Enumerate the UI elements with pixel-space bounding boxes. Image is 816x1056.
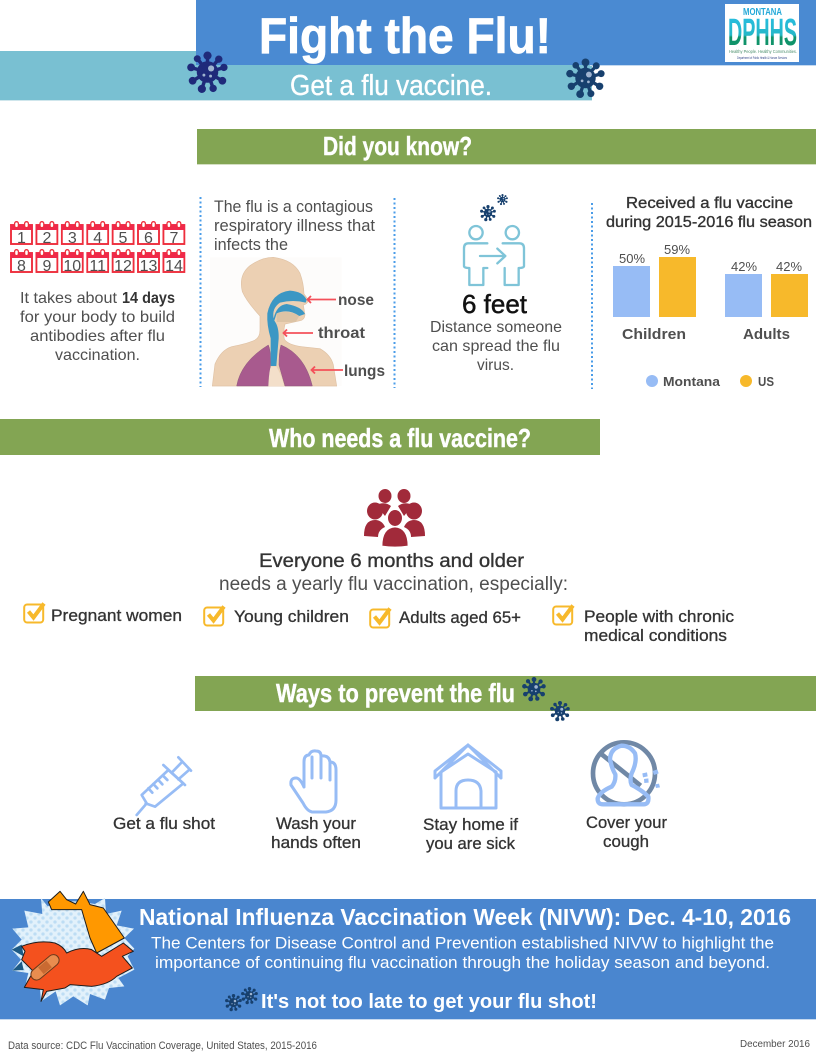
arrow: throat [284,330,313,336]
arrow: lungs [312,366,343,374]
text: yearly vaccination: needs a yearly flu vaccination, especially: [219,574,568,595]
text: antibodies: vaccination. [55,347,140,364]
calendars: 14 days: 6 [144,230,153,247]
calendars: 14 days: 12 [114,258,132,275]
label: wash your hands often [271,815,361,852]
text: antibodies: antibodies after flu [30,328,165,345]
checklist item: pregnant women: Pregnant women [51,607,182,625]
label: wash your hands often: Wash your [276,815,357,833]
label: nose: nose [338,292,374,309]
bar chart: 42% [731,259,757,274]
icon: group of people [364,489,425,547]
legend: US [758,374,774,389]
logo: Montana DPHHS: Department of Public Health & Human Services [737,56,787,60]
calendars: 14 days: 11 [89,258,106,275]
section heading: Ways to prevent the flu: Ways to prevent the flu [276,678,515,708]
section heading: Did you know? [197,129,816,165]
label: lungs: lungs [344,363,385,380]
label: stay home if you are sick [423,816,518,853]
chart title: Received a flu vaccine [626,195,793,212]
divider 2 [394,198,396,388]
label: stay home if you are sick: Stay home if [423,816,518,834]
bar chart: 42% [776,259,802,274]
prevention: stay home [423,745,518,853]
section heading: Who needs a flu vaccine?: Who needs a flu vaccine? [269,423,531,453]
label: cover your cough: Cover your [586,814,667,832]
text: antibodies: It takes about [20,290,118,307]
text: spread distance: can spread the flu [432,338,560,355]
icon: small viruses [480,194,508,221]
text: spread distance: Distance someone [430,319,562,336]
header band: title background [196,0,816,66]
label: throat: throat [318,325,366,342]
text: contagious illness [214,198,375,254]
logo: Montana DPHHS [725,4,799,62]
bar chart: Adults [743,326,790,343]
checklist item: chronic conditions: People with chronic [584,608,734,626]
panel: vaccination bar chart [606,195,812,389]
footer: date: December 2016 [740,1038,810,1050]
text: spread distance [430,319,562,374]
section heading: Ways to prevent the flu [195,676,816,711]
legend [646,374,774,389]
bar chart: 59% [664,242,690,257]
arrow: nose [308,296,336,303]
text: spread distance: virus. [477,357,514,374]
text: contagious illness: respiratory illness that [214,217,375,235]
calendars: 14 days [10,222,185,275]
text: antibodies: for your body to build [20,309,175,326]
checklist item: chronic conditions [553,606,734,645]
prevention: flu shot [113,757,215,833]
text: NIVW description: importance of continuing flu vaccination through the holiday season and beyond. [155,953,770,972]
panel: respiratory illness [210,198,385,386]
text: antibodies [20,290,175,364]
label: stay home if you are sick: you are sick [426,835,516,853]
calendars: 14 days: 13 [140,258,158,275]
legend: Montana [663,374,721,389]
calendars: 14 days: 14 [165,258,183,275]
bar chart: Children [622,326,686,343]
text: antibodies: 14 days [122,290,175,307]
calendars: 14 days: 3 [68,230,77,247]
prevention: wash hands [271,751,361,852]
divider 1 [200,197,202,387]
icon: syringe [137,757,191,815]
icon: two people with arrow [464,226,524,285]
label: cover your cough [586,814,667,851]
divider 3 [591,203,593,389]
header band: subtitle background [0,51,592,101]
checklist item: young children: Young children [234,608,349,626]
text: contagious illness: infects the [214,236,288,254]
bar chart: 50% [619,251,645,266]
calendars: 14 days: 5 [119,230,128,247]
text: contagious illness: The flu is a contagious [214,198,373,216]
label: get a flu shot: Get a flu shot [113,815,215,833]
text: NIVW description [151,934,774,972]
checklist item: chronic conditions: medical conditions [584,627,727,645]
prevention: cover cough [586,742,667,851]
checklist item: adults 65+: Adults aged 65+ [399,609,521,627]
icon: viruses on heading [522,677,570,721]
illustration: arm with bandage [12,891,134,1005]
text: NIVW description: The Centers for Disease Control and Prevention established NIVW to highlight the [151,934,774,952]
footer: data source: Data source: CDC Flu Vaccination Coverage, United States, 2015-2016 [8,1040,317,1052]
checklist item: pregnant women [24,604,182,625]
callout: not too late: It's not too late to get your flu shot! [261,991,597,1013]
calendars: 14 days: 10 [63,258,81,275]
panel: 14 days [10,222,185,364]
subtitle: Get a flu vaccine. [290,70,492,102]
icon: virus right [566,58,605,98]
icon: house [435,745,501,808]
label: wash your hands often: hands often [271,834,361,852]
bar chart [613,242,808,343]
icon: viruses [225,987,258,1011]
icon: person coughing [593,742,660,804]
section heading: Did you know?: Did you know? [323,131,472,161]
chart title [606,195,812,231]
calendars: 14 days: 1 [17,230,26,247]
logo: Montana DPHHS: Healthy People. Healthy Communities. [729,49,797,54]
calendars: 14 days: 7 [170,230,179,247]
text: everyone 6 months and older: Everyone 6 months and older [259,550,525,572]
title: Fight the Flu! [259,8,551,64]
chart title: during 2015-2016 flu season [606,214,812,231]
panel: 6 feet [430,194,562,374]
section heading: Who needs a flu vaccine? [0,419,600,455]
icon: virus left [187,52,228,93]
stat: 6 feet: 6 feet [462,289,528,319]
checklist item: young children [204,606,349,626]
logo: Montana DPHHS: MONTANA [743,7,782,18]
calendars: 14 days: 4 [93,230,102,247]
icon: hand [291,751,336,812]
calendars: 14 days: 2 [43,230,52,247]
calendars: 14 days: 9 [43,258,52,275]
heading: national influenza vaccination week: National Influenza Vaccination Week (NIVW): Dec. 4-10, 2016 [139,904,791,930]
label: cover your cough: cough [603,833,649,851]
calendars: 14 days: 8 [17,258,26,275]
illustration: respiratory system [210,257,342,386]
panel: NIVW banner [0,891,816,1020]
